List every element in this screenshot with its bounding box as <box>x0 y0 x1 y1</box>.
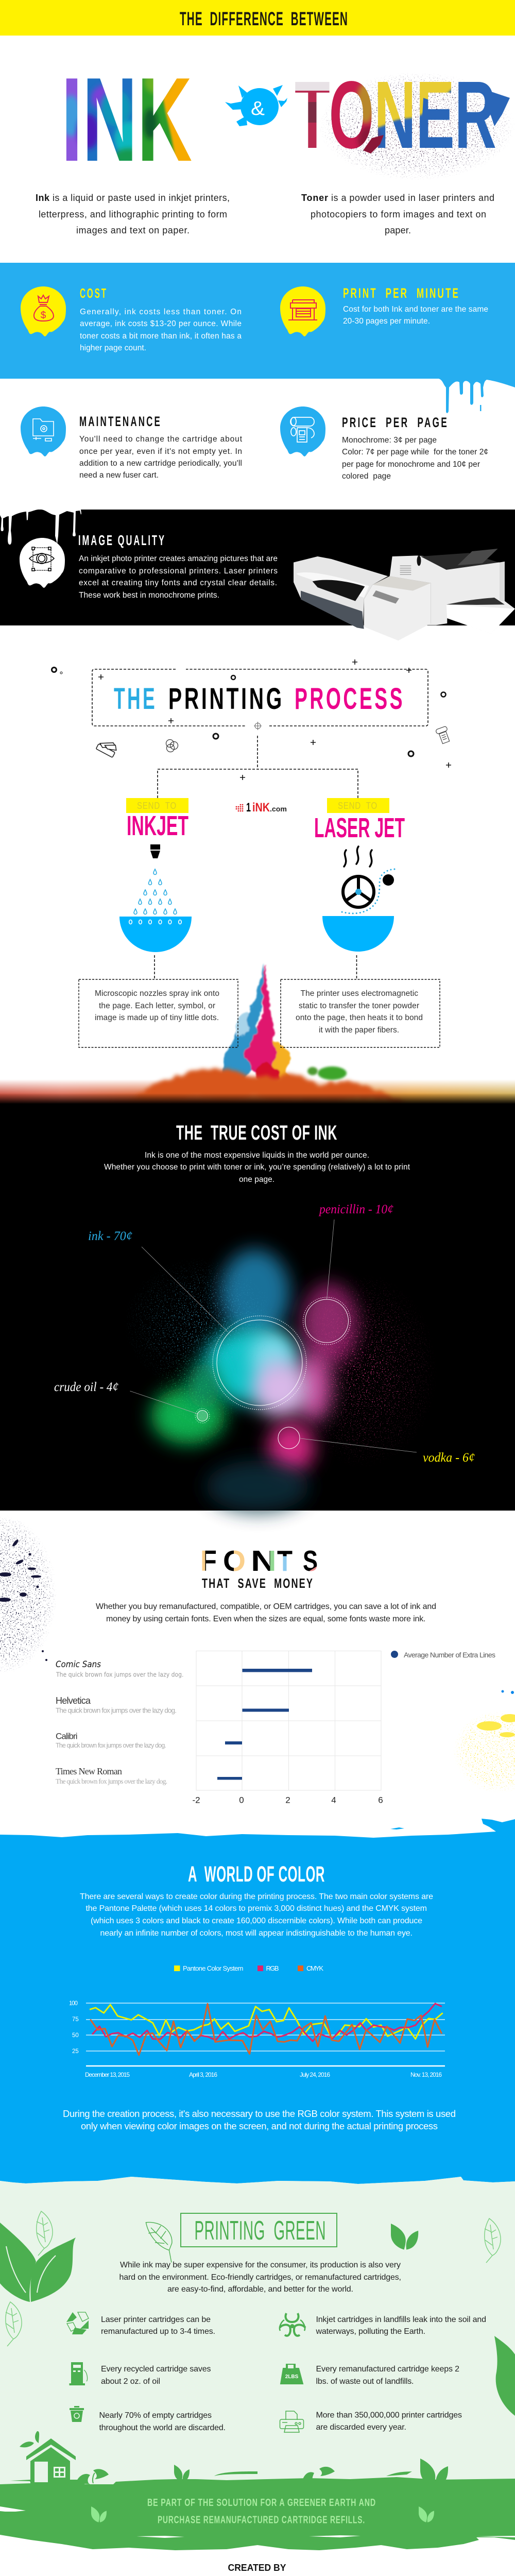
fact: waste: lbs. of waste out of landfills. <box>316 2377 414 2386</box>
heading: price per page: PRICE PER PAGE <box>342 415 449 430</box>
send to label: SEND TO <box>137 801 177 811</box>
outro text: During the creation process, it's also necessary to use the RGB color system. This system is used <box>63 2108 456 2119</box>
line chart: December 13, 2015 <box>85 2071 130 2078</box>
icon: drum wheel <box>339 869 394 913</box>
intro text: (which uses 3 colors and black to create 160,000 discernible colors). While both can produce <box>91 1917 422 1925</box>
subheading: THAT SAVE MONEY <box>202 1575 314 1591</box>
icon: colour rings <box>166 740 178 752</box>
callout: inkjet text: Microscopic nozzles spray ink onto <box>95 989 219 998</box>
intro text: ink <box>36 193 230 235</box>
icon: small roll <box>436 726 451 744</box>
heading: fonts: O <box>223 1545 246 1578</box>
outro text <box>63 2108 456 2131</box>
icon: fuel pump <box>69 2362 88 2385</box>
splatter: navy <box>0 1515 57 1674</box>
bar chart: 4 <box>331 1795 336 1805</box>
intro text: While ink may be super expensive for the consumer, its production is also very <box>120 2261 401 2269</box>
intro text: toner: photocopiers to form images and text on <box>311 209 486 219</box>
text: print per minute <box>343 305 488 326</box>
doodles around process title <box>52 659 451 780</box>
font samples: The quick brown fox jumps over the lazy dog. <box>56 1777 167 1785</box>
printers photo <box>294 549 515 640</box>
heading: A WORLD OF COLOR <box>188 1862 325 1887</box>
text: price per page: per page for monochrome and 10¢ per <box>342 460 480 469</box>
heading: printing green: PRINTING GREEN <box>195 2216 326 2246</box>
chart legend: CMYK <box>306 1964 323 1972</box>
ink horizon <box>0 1066 515 1105</box>
icon: money bag: $ <box>41 310 46 321</box>
heading: fonts: N <box>251 1545 277 1578</box>
line chart: 50 <box>72 2032 79 2039</box>
send to label: SEND TO <box>338 801 377 811</box>
intro text: There are several ways to create color during the printing process. The two main color systems are <box>80 1892 433 1901</box>
text: image quality: These work best in monochrome prints. <box>79 591 219 600</box>
intro text <box>80 1892 433 1938</box>
font samples: Comic Sans <box>56 1659 101 1670</box>
text: maintenance: You'll need to change the cartridge about <box>79 435 243 444</box>
bar chart: -2 <box>192 1795 200 1805</box>
bowl <box>322 916 394 952</box>
intro text: ink: images and text on paper. <box>76 225 190 235</box>
leaf outlines <box>6 2211 501 2346</box>
chart legend: Pantone Color System <box>183 1964 243 1972</box>
icon: weight <box>281 2364 303 2384</box>
fact: oil saved <box>69 2362 211 2386</box>
bar chart: 6 <box>378 1795 383 1805</box>
icon: colour swatches <box>96 737 118 757</box>
intro text <box>96 1602 436 1623</box>
panel: printing process title box <box>92 669 428 730</box>
chart legend: RGB <box>266 1964 279 1972</box>
intro text: are easy-to-find, affordable, and better for the world. <box>167 2285 353 2294</box>
powder cloud <box>124 1249 438 1512</box>
fact: discarded 70% <box>70 2406 226 2432</box>
logo: 1ink small <box>236 801 287 815</box>
intro text <box>119 2261 401 2294</box>
logo: 1ink small: 1 <box>246 801 251 815</box>
callout: inkjet text <box>79 979 238 1047</box>
leaf pair <box>391 2224 418 2250</box>
cta text: PURCHASE REMANUFACTURED CARTRIDGE REFILLS. <box>158 2514 365 2526</box>
cta text: BE PART OF THE SOLUTION FOR A GREENER EARTH AND <box>147 2497 376 2509</box>
callout: inkjet text: image is made up of tiny little dots. <box>95 1013 219 1022</box>
callout: laser jet text: onto the page, then heats it to bond <box>296 1013 423 1022</box>
line chart <box>69 2001 445 2078</box>
callout: ink: ink - 70¢ <box>88 1229 132 1243</box>
ink plume <box>224 962 289 1084</box>
intro text: toner <box>301 193 494 235</box>
fact: waste <box>281 2364 459 2386</box>
icon: steam <box>344 846 372 867</box>
heading: the true cost of ink: THE TRUE COST OF INK <box>176 1122 337 1144</box>
white streaks <box>0 2506 515 2538</box>
bar chart: 2 <box>285 1795 290 1805</box>
ampersand splash <box>225 85 287 126</box>
panel: printing green <box>0 2177 515 2488</box>
icon: paper roll <box>280 406 325 456</box>
heading: maintenance: MAINTENANCE <box>79 414 162 429</box>
font samples <box>56 1659 183 1785</box>
word: INK: INK <box>61 53 192 187</box>
callout: vodka <box>278 1427 475 1465</box>
icon: crosshair <box>254 722 262 730</box>
fact: landfills: waterways, polluting the Earth. <box>315 2327 425 2336</box>
line chart: April 3, 2016 <box>189 2071 217 2078</box>
text: image quality: comparative to professional printers. Laser printers <box>79 567 278 575</box>
send to label <box>126 798 188 813</box>
callout: inkjet text: the page. Each letter, symbol, or <box>99 1002 215 1010</box>
panel: price per page <box>280 406 488 481</box>
icon: printer outline <box>280 2411 304 2432</box>
heading: the printing process: THE <box>114 682 157 716</box>
heading: fonts: F <box>200 1545 217 1578</box>
flow connectors <box>158 736 358 798</box>
panel: a world of colour <box>0 1819 515 2184</box>
bowl <box>119 917 192 952</box>
drops <box>134 869 177 914</box>
fact: 350 million <box>280 2411 462 2432</box>
text: price per page: Monochrome: 3¢ per page <box>342 436 437 445</box>
logo: 1ink small: iNK <box>252 801 270 815</box>
big leaf right <box>494 2336 515 2416</box>
intro text: ink: letterpress, and lithographic printing to form <box>39 209 227 219</box>
icon: money bag <box>21 286 66 336</box>
callout: vodka: vodka - 6¢ <box>423 1451 475 1465</box>
text: maintenance: need a new fuser cart. <box>79 471 159 480</box>
line chart: 100 <box>69 2001 78 2007</box>
send to label <box>327 798 389 813</box>
text: cost <box>80 308 242 352</box>
callout: crude oil: crude oil - 4¢ <box>54 1380 118 1394</box>
fact: landfills: Inkjet cartridges in landfills leak into the soil and <box>316 2315 486 2324</box>
line chart: 75 <box>72 2016 79 2023</box>
text: maintenance <box>79 435 243 480</box>
icon: maintenance folder <box>21 406 66 456</box>
intro text: toner: Toner <box>301 193 328 203</box>
column: laser jet <box>314 798 405 952</box>
icon: nozzle <box>150 844 160 858</box>
cta text <box>147 2497 376 2526</box>
icon: printer <box>280 286 325 336</box>
heading: laser jet: LASER JET <box>314 812 405 843</box>
text: image quality: excel at creating tiny fonts and crystal clear details. <box>79 579 277 587</box>
heading: printing green <box>181 2213 337 2247</box>
panel: maintenance <box>21 406 243 480</box>
intro text: one page. <box>239 1175 274 1184</box>
fact: oil saved: about 2 oz. of oil <box>101 2377 160 2386</box>
intro text: ink: is a liquid or paste used in inkjet printers, <box>53 193 230 203</box>
intro text: hard on the environment. Eco-friendly cartridges, or remanufactured cartridges, <box>119 2273 401 2282</box>
text: maintenance: addition to a new cartridge periodically, you'll <box>79 459 242 468</box>
text: image quality: An inkjet photo printer creates amazing pictures that are <box>79 554 278 563</box>
legend: Average Number of Extra Lines <box>404 1651 495 1659</box>
text: cost: average, ink costs $13-20 per ounce. While <box>80 319 242 328</box>
title: THE DIFFERENCE BETWEEN <box>180 8 348 29</box>
panel: true cost of ink <box>0 1104 515 1512</box>
text: cost: Generally, ink costs less than toner. On <box>80 308 242 316</box>
splatter: yellow <box>453 1690 515 1793</box>
fact: 350 million: are discarded every year. <box>316 2423 406 2432</box>
intro text: Whether you choose to print with toner or ink, you’re spending (relatively) a lot to print <box>104 1163 410 1172</box>
font samples: Helvetica <box>56 1696 91 1706</box>
fact: discarded 70%: Nearly 70% of empty cartridges <box>99 2411 212 2420</box>
callout: penicillin <box>303 1202 393 1345</box>
text: price per page: Color: 7¢ per page while for the toner 2¢ <box>342 448 488 456</box>
text: image quality <box>79 554 278 600</box>
callout: ink <box>88 1229 306 1410</box>
fact: landfills <box>280 2313 486 2336</box>
font samples: The quick brown fox jumps over the lazy dog. <box>56 1671 183 1679</box>
line chart: 25 <box>72 2048 79 2055</box>
icon: recycle <box>66 2312 89 2334</box>
outro text: only when viewing color images on the screen, and not during the actual printing process <box>81 2121 438 2131</box>
callout: penicillin: penicillin - 10¢ <box>318 1202 393 1216</box>
text: price per page <box>342 436 488 481</box>
fact: oil saved: Every recycled cartridge saves <box>101 2365 211 2374</box>
intro text: Whether you buy remanufactured, compatible, or OEM cartridges, you can save a lot of ink and <box>96 1602 436 1611</box>
intro text: ink: Ink <box>36 193 50 203</box>
heading: fonts: S <box>303 1545 318 1578</box>
font samples: The quick brown fox jumps over the lazy dog. <box>56 1742 166 1749</box>
intro text: Ink is one of the most expensive liquids in the world per ounce. <box>145 1151 369 1160</box>
font samples: Times New Roman <box>56 1766 122 1776</box>
panel: fonts <box>56 1545 495 1805</box>
line chart: July 24, 2016 <box>300 2071 330 2078</box>
icon: eye <box>20 538 65 588</box>
font samples: Calibri <box>56 1731 77 1741</box>
text: print per minute: 20-30 pages per minute. <box>343 317 430 326</box>
text: cost: toner costs a bit more than ink, it often has a <box>80 332 242 341</box>
callout: crude oil <box>54 1380 210 1423</box>
callout: laser jet text: it with the paper fibers. <box>319 1026 399 1035</box>
heading: cost: COST <box>80 285 108 301</box>
white drips <box>0 507 82 545</box>
connector: inkjet to text <box>154 955 356 979</box>
panel: cost and print per minute <box>0 263 515 413</box>
icon: trash bin <box>70 2406 84 2422</box>
fact: waste: Every remanufactured cartridge keeps 2 <box>316 2365 459 2374</box>
text: maintenance: once per year, even if it's not empty yet. In <box>79 447 242 456</box>
chart legend <box>174 1964 323 1972</box>
text: price per page: colored page <box>342 472 391 481</box>
ampersand splash: & <box>251 98 265 120</box>
intro text: the Pantone Palette (which uses 14 colors to premix 3,000 distinct hues) and the CMYK system <box>85 1904 427 1913</box>
heading: image quality: IMAGE QUALITY <box>78 532 166 548</box>
sprouts <box>76 2459 448 2487</box>
leaves left <box>0 2223 76 2302</box>
icon: weight: 2LBS <box>285 2374 299 2380</box>
logo: 1ink small: .com <box>270 805 287 813</box>
light leaves <box>91 2506 434 2522</box>
bar chart: 0 <box>239 1795 244 1805</box>
header band <box>0 0 515 36</box>
intro text: nearly an infinite number of colors, most will appear indistinguishable to the human eye. <box>100 1929 413 1938</box>
intro text <box>104 1151 410 1184</box>
heading: fonts: T <box>277 1545 293 1578</box>
heading: created by: CREATED BY <box>228 2563 286 2573</box>
panel: call to action ground <box>0 2431 515 2550</box>
fact: cartridges remanufactured: Laser printer cartridges can be <box>101 2315 211 2324</box>
panel: image quality <box>0 507 515 640</box>
house <box>20 2431 76 2484</box>
font samples: The quick brown fox jumps over the lazy dog. <box>56 1706 177 1715</box>
text: cost: higher page count. <box>80 344 146 352</box>
heading: inkjet: INKJET <box>127 810 188 841</box>
text: print per minute: Cost for both Ink and toner are the same <box>343 305 488 314</box>
intro text: toner: paper. <box>385 225 411 235</box>
fact: 350 million: More than 350,000,000 printer cartridges <box>316 2411 462 2419</box>
heading: the printing process <box>114 682 405 716</box>
fact: cartridges remanufactured: remanufactured up to 3-4 times. <box>101 2327 215 2336</box>
callout: laser jet text <box>281 979 440 1047</box>
fact: discarded 70%: throughout the world are discarded. <box>99 2424 226 2432</box>
intro text: toner: is a powder used in laser printers and <box>331 193 494 203</box>
icon: biohazard <box>280 2313 305 2336</box>
callout: laser jet text: The printer uses electromagnetic <box>301 989 418 998</box>
callout: laser jet text: static to transfer the toner powder <box>299 1002 419 1010</box>
fact: cartridges remanufactured <box>66 2312 215 2336</box>
heading: fonts <box>200 1545 318 1578</box>
bar chart <box>192 1651 383 1805</box>
heading: the printing process: PRINTING <box>168 682 284 716</box>
line chart: Nov. 13, 2016 <box>410 2071 442 2078</box>
heading: the printing process: PROCESS <box>295 682 405 716</box>
column: inkjet <box>119 798 192 952</box>
intro text: money by using certain fonts. Even when the sizes are equal, some fonts waste more ink. <box>106 1615 425 1623</box>
